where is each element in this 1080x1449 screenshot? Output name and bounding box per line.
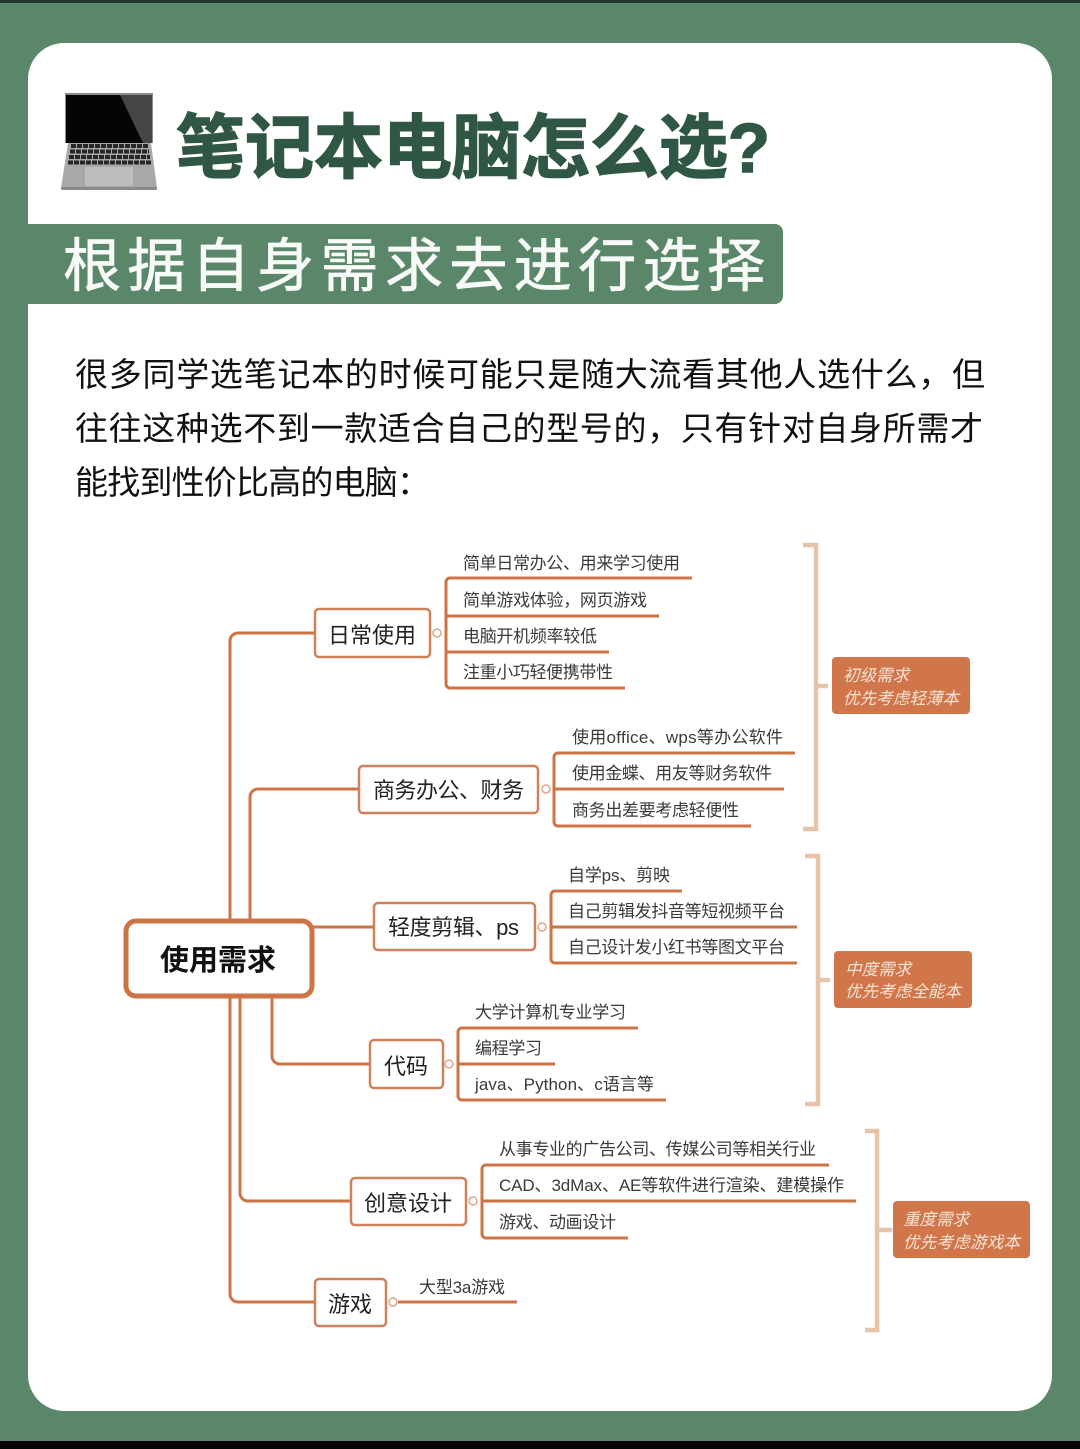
top dark edge xyxy=(0,0,1080,3)
branch: light editing: 轻度剪辑、ps xyxy=(388,915,519,940)
branch: business and finance xyxy=(359,727,795,826)
branch: code xyxy=(370,1003,666,1100)
branch: code: 代码 xyxy=(384,1054,428,1079)
intro text block: 很多同学选笔记本的时候可能只是随大流看其他人选什么，但 xyxy=(75,356,985,393)
bracket and callout: heavy need xyxy=(865,1131,1030,1330)
branch: daily use: 简单日常办公、用来学习使用 xyxy=(463,553,680,573)
branch: light editing: 自学ps、剪映 xyxy=(568,866,670,885)
branch: games xyxy=(315,1278,517,1326)
bracket and callout: entry-level need: 优先考虑轻薄本 xyxy=(843,690,962,708)
branch: light editing: 自己剪辑发抖音等短视频平台 xyxy=(568,902,785,921)
bracket and callout: medium need xyxy=(805,856,972,1104)
subtitle banner: 根据自身需求去进行选择 xyxy=(63,234,765,299)
branch: games: 游戏 xyxy=(328,1292,372,1317)
branch: business and finance: 商务出差要考虑轻便性 xyxy=(572,801,739,820)
icon: laptop xyxy=(61,93,157,190)
branch: business and finance: 使用金蝶、用友等财务软件 xyxy=(572,763,772,783)
bracket and callout: heavy need: 优先考虑游戏本 xyxy=(903,1234,1022,1252)
bracket and callout: heavy need: 重度需求 xyxy=(903,1211,972,1229)
branch: code: 大学计算机专业学习 xyxy=(475,1003,626,1022)
intro text block: 往往这种选不到一款适合自己的型号的，只有针对自身所需才 xyxy=(75,410,983,447)
branch: business and finance: 使用office、wps等办公软件 xyxy=(572,727,783,747)
title: 笔记本电脑怎么选? xyxy=(176,109,770,187)
branch: creative design: 创意设计 xyxy=(364,1191,452,1216)
intro text block: 能找到性价比高的电脑： xyxy=(75,464,430,501)
branch: daily use xyxy=(315,553,692,688)
bracket and callout: entry-level need: 初级需求 xyxy=(843,667,912,685)
branch: creative design: CAD、3dMax、AE等软件进行渲染、建模操作 xyxy=(499,1176,844,1195)
branch: daily use: 注重小巧轻便携带性 xyxy=(463,663,613,682)
branch: business and finance: 商务办公、财务 xyxy=(373,778,524,803)
root node xyxy=(126,921,312,996)
branch: games: 大型3a游戏 xyxy=(419,1278,505,1297)
bracket and callout: medium need: 优先考虑全能本 xyxy=(845,982,964,1001)
branch: light editing: 自己设计发小红书等图文平台 xyxy=(568,938,785,957)
branch: creative design xyxy=(351,1140,856,1238)
bracket and callout: medium need: 中度需求 xyxy=(845,961,914,979)
branch: code: 编程学习 xyxy=(475,1039,542,1058)
branch: code: java、Python、c语言等 xyxy=(474,1075,654,1094)
branch: daily use: 日常使用 xyxy=(328,623,416,648)
branch: creative design: 游戏、动画设计 xyxy=(499,1213,616,1232)
mind map connectors xyxy=(230,633,374,1302)
branch: light editing xyxy=(374,866,797,963)
intro text block xyxy=(75,356,985,501)
branch: daily use: 简单游戏体验，网页游戏 xyxy=(463,591,647,610)
bracket and callout: entry-level need xyxy=(803,545,970,829)
branch: creative design: 从事专业的广告公司、传媒公司等相关行业 xyxy=(499,1140,816,1159)
bottom black edge xyxy=(0,1441,1080,1449)
root node: 使用需求 xyxy=(160,944,276,977)
branch: daily use: 电脑开机频率较低 xyxy=(463,627,597,646)
